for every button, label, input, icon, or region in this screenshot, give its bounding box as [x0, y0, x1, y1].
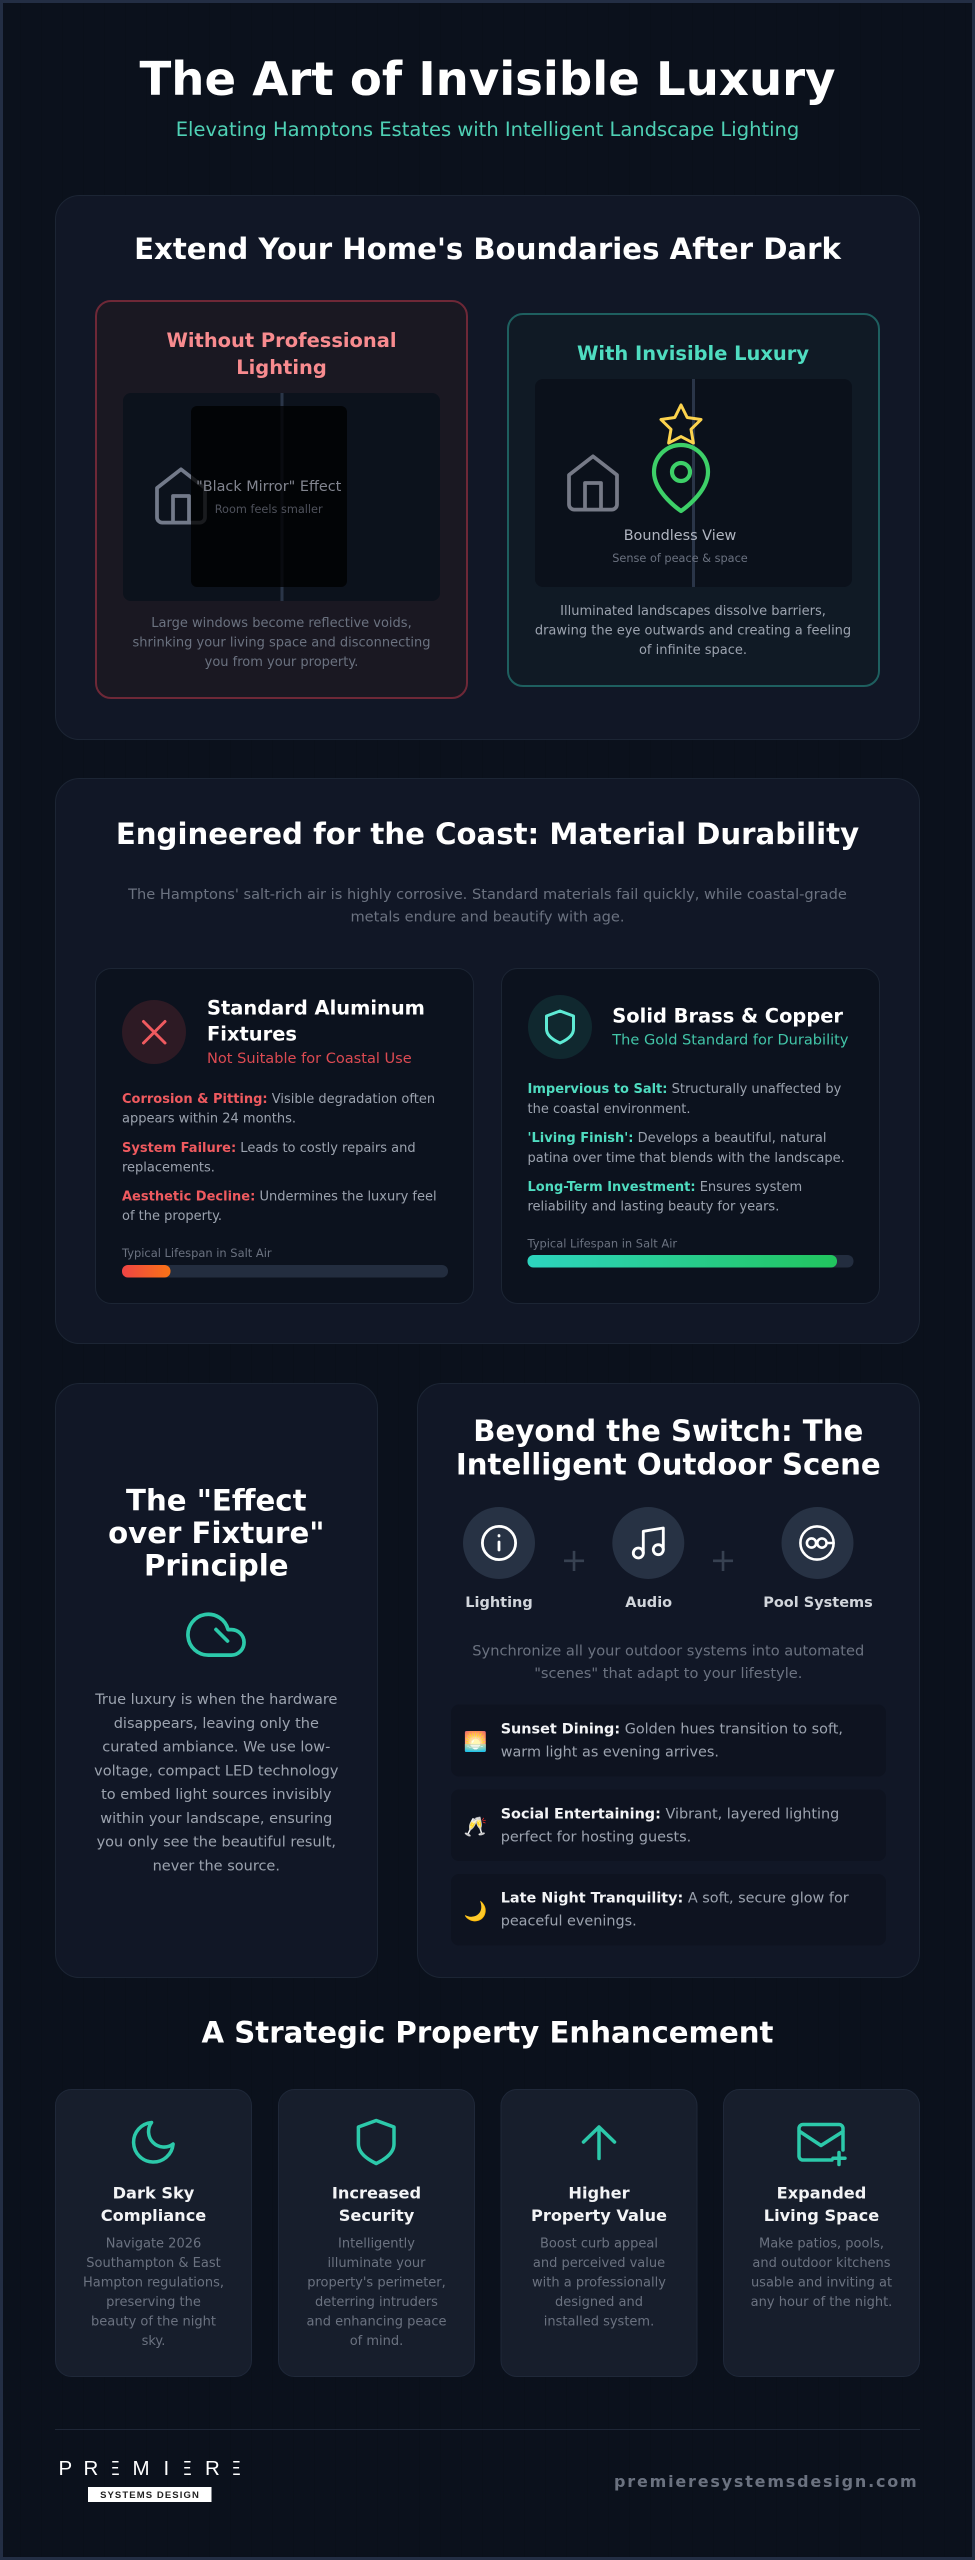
title: The Art of Invisible Luxury — [140, 52, 835, 106]
description: value: installed system. — [544, 2314, 654, 2330]
description: living space: any hour of the night. — [751, 2295, 892, 2310]
description: with luxury: Illuminated landscapes dissolve barriers, — [560, 604, 826, 619]
subheading: not suitable: Not Suitable for Coastal Use — [207, 1050, 412, 1067]
heading: aluminum: Standard Aluminum — [207, 996, 425, 1020]
text: social entertaining: Vibrant, layered lighting — [661, 1806, 839, 1822]
description: value: designed and — [555, 2295, 643, 2310]
icon: music — [633, 1528, 663, 1558]
heading: dark sky: Dark Sky — [113, 2184, 195, 2202]
heading: brass: Solid Brass & Copper — [612, 1004, 843, 1028]
description: dark sky: Navigate 2026 — [106, 2236, 201, 2252]
logo: premiere systems design: SYSTEMS DESIGN — [100, 2490, 200, 2501]
panel: with invisible luxury — [508, 314, 879, 686]
text: late night: A soft, secure glow for — [683, 1890, 849, 1906]
plus: + — [561, 1541, 587, 1579]
text: late night: Late Night Tranquility: — [501, 1890, 683, 1906]
label: peace and space: Sense of peace & space — [612, 552, 748, 565]
list: brass benefits: patina over time that blends with the landscape. — [528, 1151, 845, 1166]
list: brass benefits: Ensures system — [696, 1180, 802, 1195]
list: brass benefits: reliability and lasting beauty for years. — [528, 1200, 779, 1214]
bar: lifespan 95 percent — [528, 1255, 854, 1268]
description: effect over fixture: curated ambiance. We use low- — [102, 1740, 330, 1756]
label: room feels smaller: Room feels smaller — [215, 503, 323, 516]
list: brass benefits: 'Living Finish': — [528, 1131, 633, 1146]
description: value: and perceived value — [533, 2256, 665, 2271]
icon: location pin — [654, 445, 708, 511]
logo: premiere systems design: R — [205, 2457, 220, 2480]
description: dark sky: beauty of the night — [91, 2314, 216, 2330]
heading: security: Security — [339, 2206, 415, 2225]
heading: beyond the switch: Intelligent Outdoor Scene — [456, 1448, 881, 1482]
list: aluminum drawbacks: appears within 24 months. — [122, 1112, 296, 1126]
description: value: Boost curb appeal — [540, 2236, 658, 2252]
list: aluminum drawbacks: Undermines the luxury feel — [255, 1190, 437, 1204]
panel: extend your home's boundaries — [56, 196, 920, 740]
website url: premieresystemsdesign.com — [614, 2472, 918, 2491]
card: higher property value — [501, 2090, 697, 2376]
description: dark sky: preserving the — [106, 2295, 201, 2310]
label: pool: Pool Systems — [763, 1595, 873, 1611]
list: brass benefits: the coastal environment. — [528, 1102, 691, 1117]
description: security: of mind. — [350, 2334, 403, 2349]
description: security: property's perimeter, — [307, 2276, 446, 2290]
heading: with luxury: With Invisible Luxury — [577, 342, 809, 365]
description: effect over fixture: within your landscape, ensuring — [100, 1811, 332, 1827]
list: brass benefits: Long-Term Investment: — [528, 1180, 696, 1195]
list: aluminum drawbacks: Leads to costly repairs and — [236, 1141, 416, 1156]
row: social entertaining — [451, 1790, 886, 1861]
icon: info — [482, 1526, 516, 1560]
reflective window — [191, 406, 347, 587]
label: black mirror: "Black Mirror" Effect — [196, 479, 342, 495]
heading: without lighting: Lighting — [236, 356, 327, 379]
list: aluminum drawbacks: of the property. — [122, 1209, 222, 1224]
heading: beyond the switch: Beyond the Switch: The — [473, 1414, 863, 1448]
icon: cloud — [188, 1614, 244, 1655]
text: social entertaining: Social Entertaining: — [501, 1806, 661, 1822]
icon: shield in circle — [528, 995, 592, 1059]
list: aluminum drawbacks: Aesthetic Decline: — [122, 1190, 255, 1204]
icon: envelope plus — [799, 2124, 845, 2164]
description: without lighting: Large windows become reflective voids, — [151, 616, 412, 631]
heading: aluminum: Fixtures — [207, 1022, 297, 1046]
heading: living space: Living Space — [764, 2206, 879, 2225]
heading: without lighting: Without Professional — [166, 329, 397, 352]
description: without lighting: you from your property. — [205, 655, 358, 670]
plus: + — [710, 1541, 736, 1579]
description: salt air: metals endure and beautify with age. — [350, 908, 625, 926]
list: aluminum drawbacks: Visible degradation often — [268, 1092, 435, 1107]
subheading: gold standard: The Gold Standard for Durability — [611, 1032, 849, 1048]
logo: premiere systems design: E — [230, 2457, 241, 2480]
description: effect over fixture: disappears, leaving only the — [114, 1716, 319, 1732]
icon: shield — [358, 2120, 394, 2164]
description: effect over fixture: voltage, compact LED technology — [94, 1764, 339, 1780]
description: living space: and outdoor kitchens — [752, 2256, 891, 2271]
list: aluminum drawbacks: Corrosion & Pitting: — [122, 1092, 268, 1107]
description: effect over fixture: you only see the beautiful result, — [97, 1834, 336, 1850]
description: value: with a professionally — [532, 2276, 666, 2290]
icon: arrow up — [584, 2127, 614, 2158]
description: salt air: The Hamptons' salt-rich air is highly corrosive. Standard materials fail quickly, while coastal-grade — [127, 886, 847, 903]
logo: premiere systems design: MI — [132, 2457, 169, 2480]
heading: living space: Expanded — [777, 2184, 866, 2202]
panel: intelligent outdoor scene — [418, 1384, 920, 1978]
description: dark sky: Southampton & East — [86, 2256, 221, 2271]
row: late night tranquility — [451, 1874, 886, 1946]
list: aluminum drawbacks: System Failure: — [122, 1141, 236, 1156]
scene: black mirror effect — [123, 393, 440, 601]
system: pool — [763, 1507, 873, 1611]
icon: moon: 🌙 — [463, 1900, 487, 1922]
heading: strategic enhancement: A Strategic Property Enhancement — [202, 2016, 774, 2050]
icon: house — [157, 469, 205, 523]
heading: effect over fixture: over Fixture" — [108, 1516, 324, 1550]
icon: pool — [800, 1526, 834, 1560]
text: sunset dining: warm light as evening arrives. — [501, 1744, 719, 1760]
description: security: Intelligently — [338, 2236, 415, 2252]
list: aluminum drawbacks: replacements. — [122, 1160, 215, 1176]
description: with luxury: drawing the eye outwards and creating a feeling — [535, 624, 851, 638]
description: effect over fixture: never the source. — [153, 1858, 280, 1874]
card: expanded living space — [724, 2090, 920, 2376]
description: effect over fixture: True luxury is when the hardware — [94, 1692, 337, 1708]
icon: house — [569, 456, 617, 510]
logo: premiere systems design: PR — [58, 2457, 98, 2480]
icon: moon — [134, 2122, 173, 2162]
text: social entertaining: perfect for hosting guests. — [501, 1830, 691, 1846]
description: without lighting: shrinking your living space and disconnecting — [133, 636, 430, 650]
panel: material durability — [56, 778, 920, 1344]
card: solid brass and copper — [502, 968, 880, 1304]
description: dark sky: sky. — [142, 2334, 165, 2349]
icon: toast: 🥂 — [463, 1815, 487, 1838]
bar: lifespan 15 percent — [122, 1265, 448, 1278]
text: sunset dining: Golden hues transition to soft, — [620, 1722, 843, 1738]
description: effect over fixture: to embed light sources invisibly — [101, 1787, 332, 1803]
description: with luxury: of infinite space. — [639, 643, 747, 658]
logo: premiere systems design: E — [109, 2457, 120, 2480]
heading: effect over fixture: The "Effect — [126, 1484, 307, 1518]
description: dark sky: Hampton regulations, — [83, 2276, 224, 2290]
description: security: and enhancing peace — [306, 2314, 447, 2330]
description: synchronize: Synchronize all your outdoor systems into automated — [472, 1642, 864, 1660]
description: security: deterring intruders — [315, 2295, 438, 2310]
panel: without professional lighting — [96, 301, 467, 698]
heading: value: Property Value — [531, 2206, 667, 2225]
label: lifespan: Typical Lifespan in Salt Air — [526, 1236, 677, 1250]
heading: value: Higher — [568, 2184, 630, 2202]
logo: premiere systems design — [58, 2457, 241, 2502]
logo: premiere systems design: E — [181, 2457, 192, 2480]
system: lighting — [463, 1507, 535, 1611]
label: audio: Audio — [625, 1595, 672, 1611]
heading: extend boundaries: Extend Your Home's Boundaries After Dark — [134, 232, 842, 266]
list: brass benefits: Impervious to Salt: — [528, 1082, 667, 1097]
icon: sunset: 🌅 — [463, 1730, 487, 1753]
scene: boundless view — [535, 379, 852, 587]
label: lighting: Lighting — [465, 1595, 533, 1611]
description: synchronize: "scenes" that adapt to your lifestyle. — [534, 1665, 802, 1682]
description: living space: Make patios, pools, — [759, 2236, 884, 2252]
heading: durability: Engineered for the Coast: Material Durability — [116, 817, 859, 851]
text: sunset dining: Sunset Dining: — [501, 1722, 620, 1738]
icon: star — [661, 405, 701, 443]
description: security: illuminate your — [327, 2256, 426, 2271]
label: lifespan: Typical Lifespan in Salt Air — [121, 1246, 272, 1260]
list: brass benefits: Develops a beautiful, natural — [633, 1131, 826, 1146]
label: boundless view: Boundless View — [624, 528, 737, 544]
card: dark sky compliance — [56, 2090, 252, 2376]
row: sunset dining — [451, 1704, 886, 1776]
list: brass benefits: Structurally unaffected by — [667, 1082, 842, 1097]
system: audio — [612, 1507, 684, 1611]
heading: security: Increased — [332, 2184, 421, 2202]
panel: effect over fixture — [56, 1384, 378, 1978]
subtitle: Elevating Hamptons Estates with Intelligent Landscape Lighting — [176, 118, 799, 141]
card: standard aluminum — [96, 968, 474, 1304]
heading: effect over fixture: Principle — [144, 1548, 289, 1582]
description: living space: usable and inviting at — [751, 2276, 892, 2290]
card: increased security — [278, 2090, 474, 2376]
text: late night: peaceful evenings. — [501, 1914, 637, 1930]
heading: dark sky: Compliance — [101, 2206, 206, 2225]
icon: x in circle — [122, 1000, 186, 1064]
